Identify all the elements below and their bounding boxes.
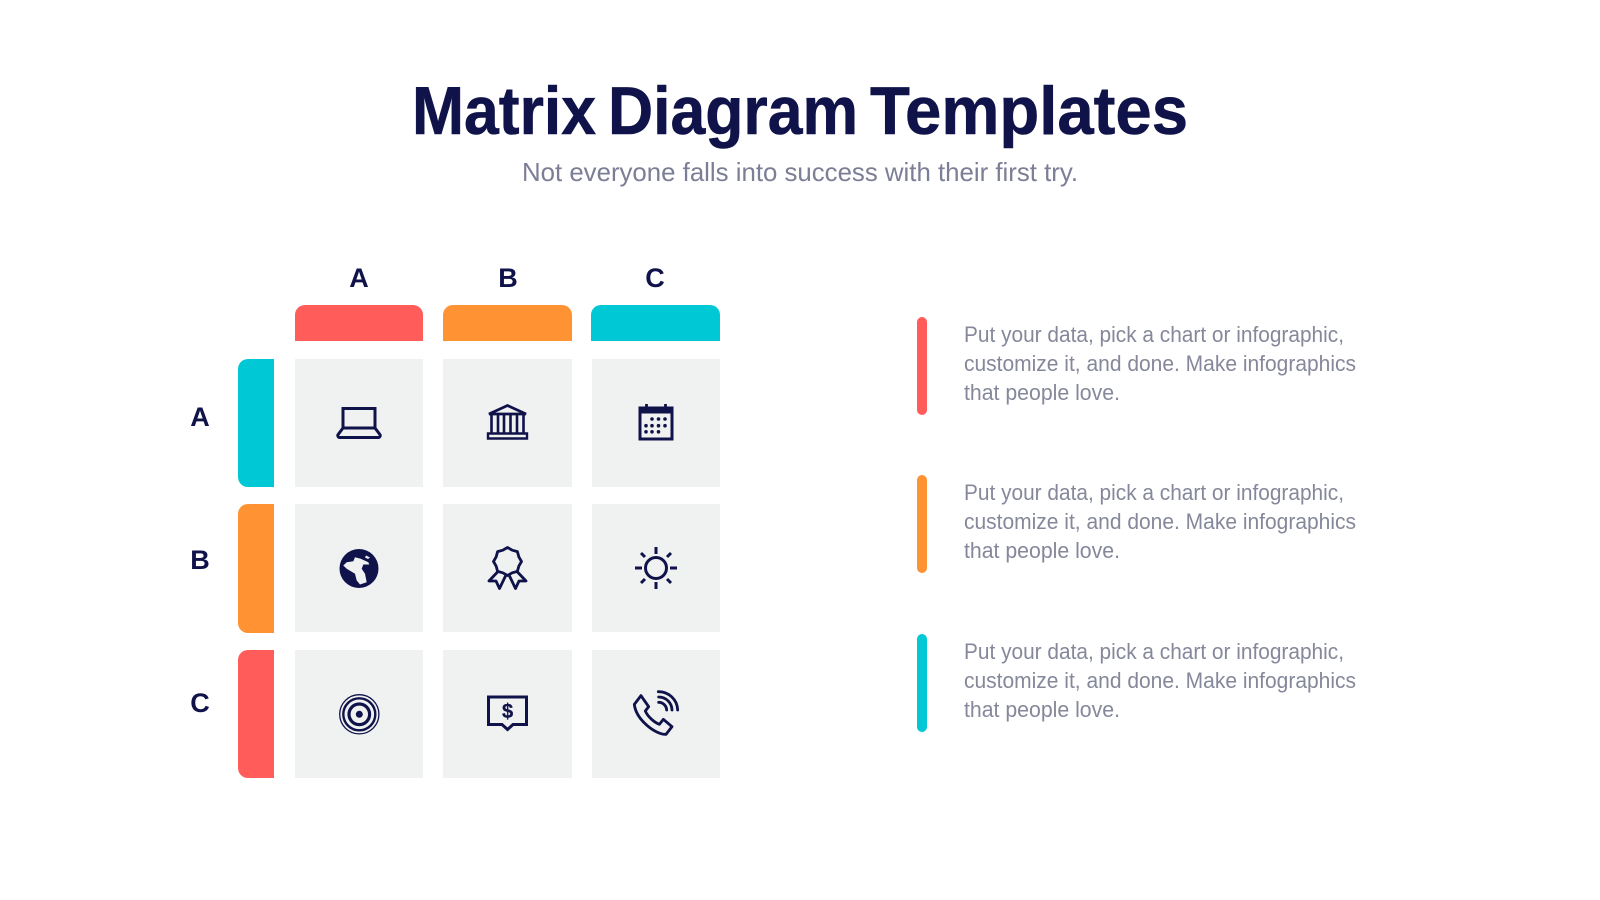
- icon: globe: [340, 549, 378, 588]
- cell B-C: sun: [592, 504, 720, 632]
- title: Diagram: [608, 73, 858, 149]
- text block 1: [964, 322, 1356, 405]
- cell A-A: laptop: [295, 359, 423, 487]
- icon: phone with signal: [634, 692, 678, 734]
- icon: calendar: [640, 404, 672, 439]
- cell B-A: globe: [295, 504, 423, 632]
- row label B: B: [190, 545, 210, 575]
- cell C-A: target: [295, 650, 423, 778]
- text block 2: Put your data, pick a chart or infographic,: [964, 480, 1344, 505]
- icon: target: [340, 695, 379, 734]
- text block 3: that people love.: [964, 697, 1120, 722]
- row header B: [238, 504, 274, 633]
- text block 2: that people love.: [964, 538, 1120, 563]
- icon: laptop: [338, 408, 380, 438]
- accent bar: teal: [917, 634, 927, 732]
- column header B: [443, 305, 572, 341]
- column label B: B: [498, 263, 518, 293]
- row label C: C: [190, 688, 210, 718]
- column header A: [295, 305, 423, 341]
- cell A-B: bank: [443, 359, 572, 487]
- title: [412, 73, 1188, 149]
- panel: description 1: [917, 317, 1356, 415]
- title: Matrix: [412, 73, 596, 149]
- text block 1: customize it, and done. Make infographics: [964, 351, 1356, 376]
- cell B-B: award: [443, 504, 572, 632]
- cell A-C: calendar: [592, 359, 720, 487]
- text block 1: Put your data, pick a chart or infographic,: [964, 322, 1344, 347]
- text block 3: Put your data, pick a chart or infographic,: [964, 639, 1344, 664]
- text block 2: customize it, and done. Make infographics: [964, 509, 1356, 534]
- text block 3: customize it, and done. Make infographics: [964, 668, 1356, 693]
- subtitle: Not everyone falls into success with their first try.: [522, 157, 1078, 187]
- column header C: [591, 305, 720, 341]
- cell C-C: phone: [592, 650, 720, 778]
- text block 3: [964, 639, 1356, 722]
- row label A: A: [190, 402, 210, 432]
- icon: award ribbon: [489, 548, 526, 588]
- icon: sun: [635, 547, 677, 589]
- panel: description 2: [917, 475, 1356, 573]
- text block 1: that people love.: [964, 380, 1120, 405]
- text block 2: [964, 480, 1356, 563]
- column label A: A: [349, 263, 369, 293]
- accent bar: orange: [917, 475, 927, 573]
- row header C: [238, 650, 274, 778]
- icon: dollar speech bubble: $: [502, 701, 513, 723]
- panel: description 3: [917, 634, 1356, 732]
- row header A: [238, 359, 274, 487]
- icon: bank: [488, 406, 527, 438]
- column label C: C: [645, 263, 665, 293]
- accent bar: red: [917, 317, 927, 415]
- title: Templates: [870, 73, 1188, 149]
- cell C-B: dollar note: [443, 650, 572, 778]
- panel: matrix: [190, 263, 720, 778]
